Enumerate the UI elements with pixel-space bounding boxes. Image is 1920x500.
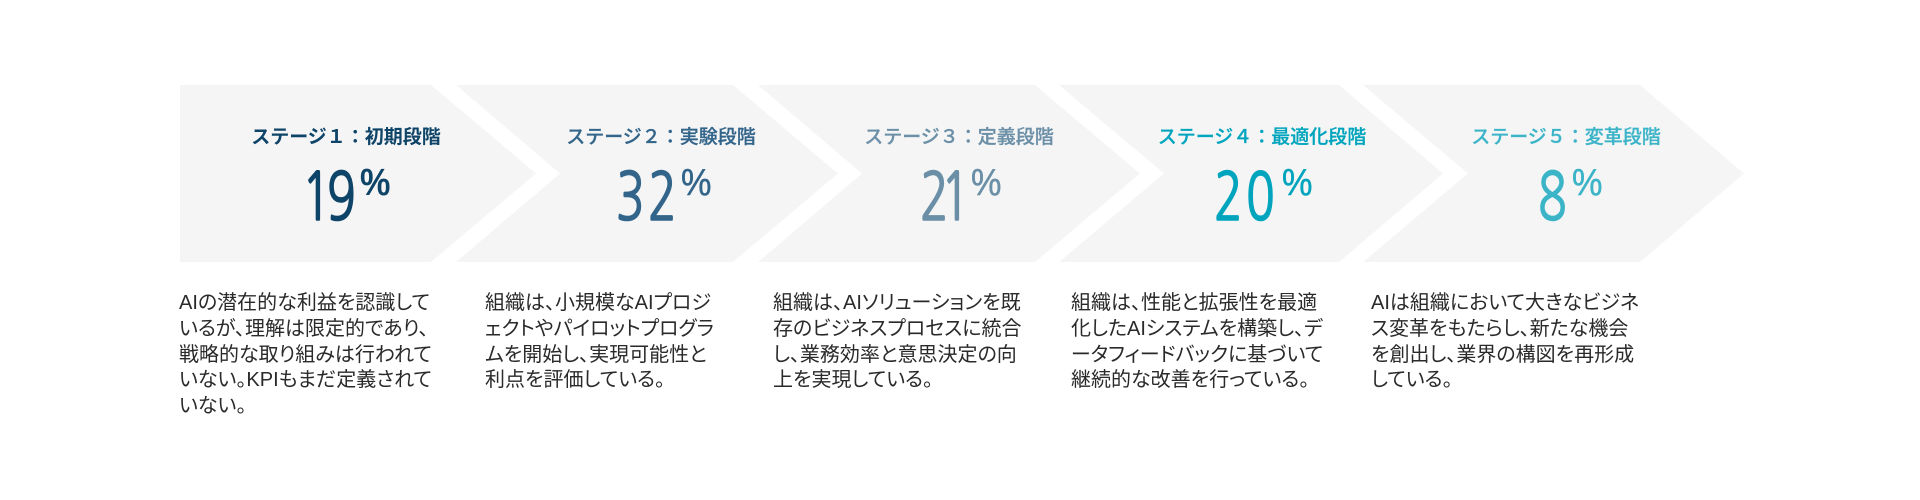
number: 8%: 8 xyxy=(1538,165,1567,230)
text block: stage 2 description: 組織は、小規模なAIプロジ xyxy=(485,291,711,314)
heading: stage 2: ステージ２：実験段階 xyxy=(566,126,756,148)
text block: stage 4 description: 組織は、性能と拡張性を最適 xyxy=(1071,291,1317,314)
heading: stage 1: ステージ１：初期段階 xyxy=(251,126,441,148)
text block: stage 4 description: 継続的な改善を行っている。 xyxy=(1071,368,1309,391)
text block: stage 3 description: し、業務効率と意思決定の向 xyxy=(773,343,1017,366)
text block: stage 2 description: 利点を評価している。 xyxy=(485,368,665,391)
chevron: stage 2 xyxy=(456,85,838,262)
number: 20%: % xyxy=(1282,160,1312,203)
text block: stage 5 description: ス変革をもたらし、新たな機会 xyxy=(1371,317,1628,340)
chevron: stage 3 xyxy=(758,85,1140,262)
text block: stage 2 description xyxy=(485,291,714,391)
number: 32%: 3 xyxy=(616,165,645,230)
text block: stage 5 description xyxy=(1371,291,1639,391)
number: 21% xyxy=(920,160,1001,230)
chevron: stage 5 xyxy=(1363,85,1744,262)
number: 8%: % xyxy=(1572,160,1602,203)
number: 32%: 2 xyxy=(648,165,677,230)
number: 21%: 2 xyxy=(920,165,949,230)
text block: stage 4 description: ータフィードバックに基づいて xyxy=(1071,343,1323,366)
number: 8% xyxy=(1538,160,1602,230)
text block: stage 2 description: ムを開始し、実現可能性と xyxy=(485,343,707,366)
text block: stage 1 description xyxy=(179,291,432,417)
number: 19%: % xyxy=(360,160,390,203)
number: 20%: 0 xyxy=(1246,165,1275,230)
panel: stage 5 xyxy=(1363,85,1744,262)
text block: stage 1 description: AIの潜在的な利益を認識して xyxy=(179,291,430,314)
number: 20% xyxy=(1214,160,1312,230)
text block: stage 4 description: 化したAIシステムを構築し、デ xyxy=(1071,317,1323,340)
number: 32% xyxy=(616,160,711,230)
text block: stage 2 description: ェクトやパイロットプログラ xyxy=(485,317,714,340)
number: 21%: 1 xyxy=(941,165,970,230)
text block: stage 3 description: 存のビジネスプロセスに統合 xyxy=(773,317,1022,340)
number: 19%: 9 xyxy=(327,165,356,230)
text block: stage 3 description xyxy=(773,291,1022,391)
text block: stage 5 description: を創出し、業界の構図を再形成 xyxy=(1371,343,1634,366)
panel: stage 2 xyxy=(456,85,838,262)
number: 19%: 1 xyxy=(302,165,331,230)
heading: stage 4: ステージ４：最適化段階 xyxy=(1158,126,1366,148)
number: 32%: % xyxy=(681,160,711,203)
heading: stage 3: ステージ３：定義段階 xyxy=(864,126,1054,148)
panel: stage 4 xyxy=(1059,85,1443,262)
text block: stage 4 description xyxy=(1071,291,1323,391)
text block: stage 1 description: 戦略的な取り組みは行われて xyxy=(179,343,432,366)
panel: stage 1 xyxy=(180,85,536,262)
text block: stage 5 description: AIは組織において大きなビジネ xyxy=(1371,291,1639,314)
heading: stage 5: ステージ５：変革段階 xyxy=(1471,126,1661,148)
text block: stage 1 description: いるが、理解は限定的であり、 xyxy=(179,317,429,340)
chevron: stage 1 xyxy=(180,85,536,262)
chevron: stage 4 xyxy=(1059,85,1443,262)
text block: stage 3 description: 組織は、AIソリューションを既 xyxy=(773,291,1021,314)
panel: stage 3 xyxy=(758,85,1140,262)
text block: stage 3 description: 上を実現している。 xyxy=(773,368,933,391)
text block: stage 5 description: している。 xyxy=(1371,369,1452,391)
number: 21%: % xyxy=(971,160,1001,203)
number: 20%: 2 xyxy=(1214,165,1243,230)
text block: stage 1 description: いない。KPIもまだ定義されて xyxy=(179,368,432,391)
number: 19% xyxy=(302,160,390,230)
text block: stage 1 description: いない。 xyxy=(179,395,246,417)
